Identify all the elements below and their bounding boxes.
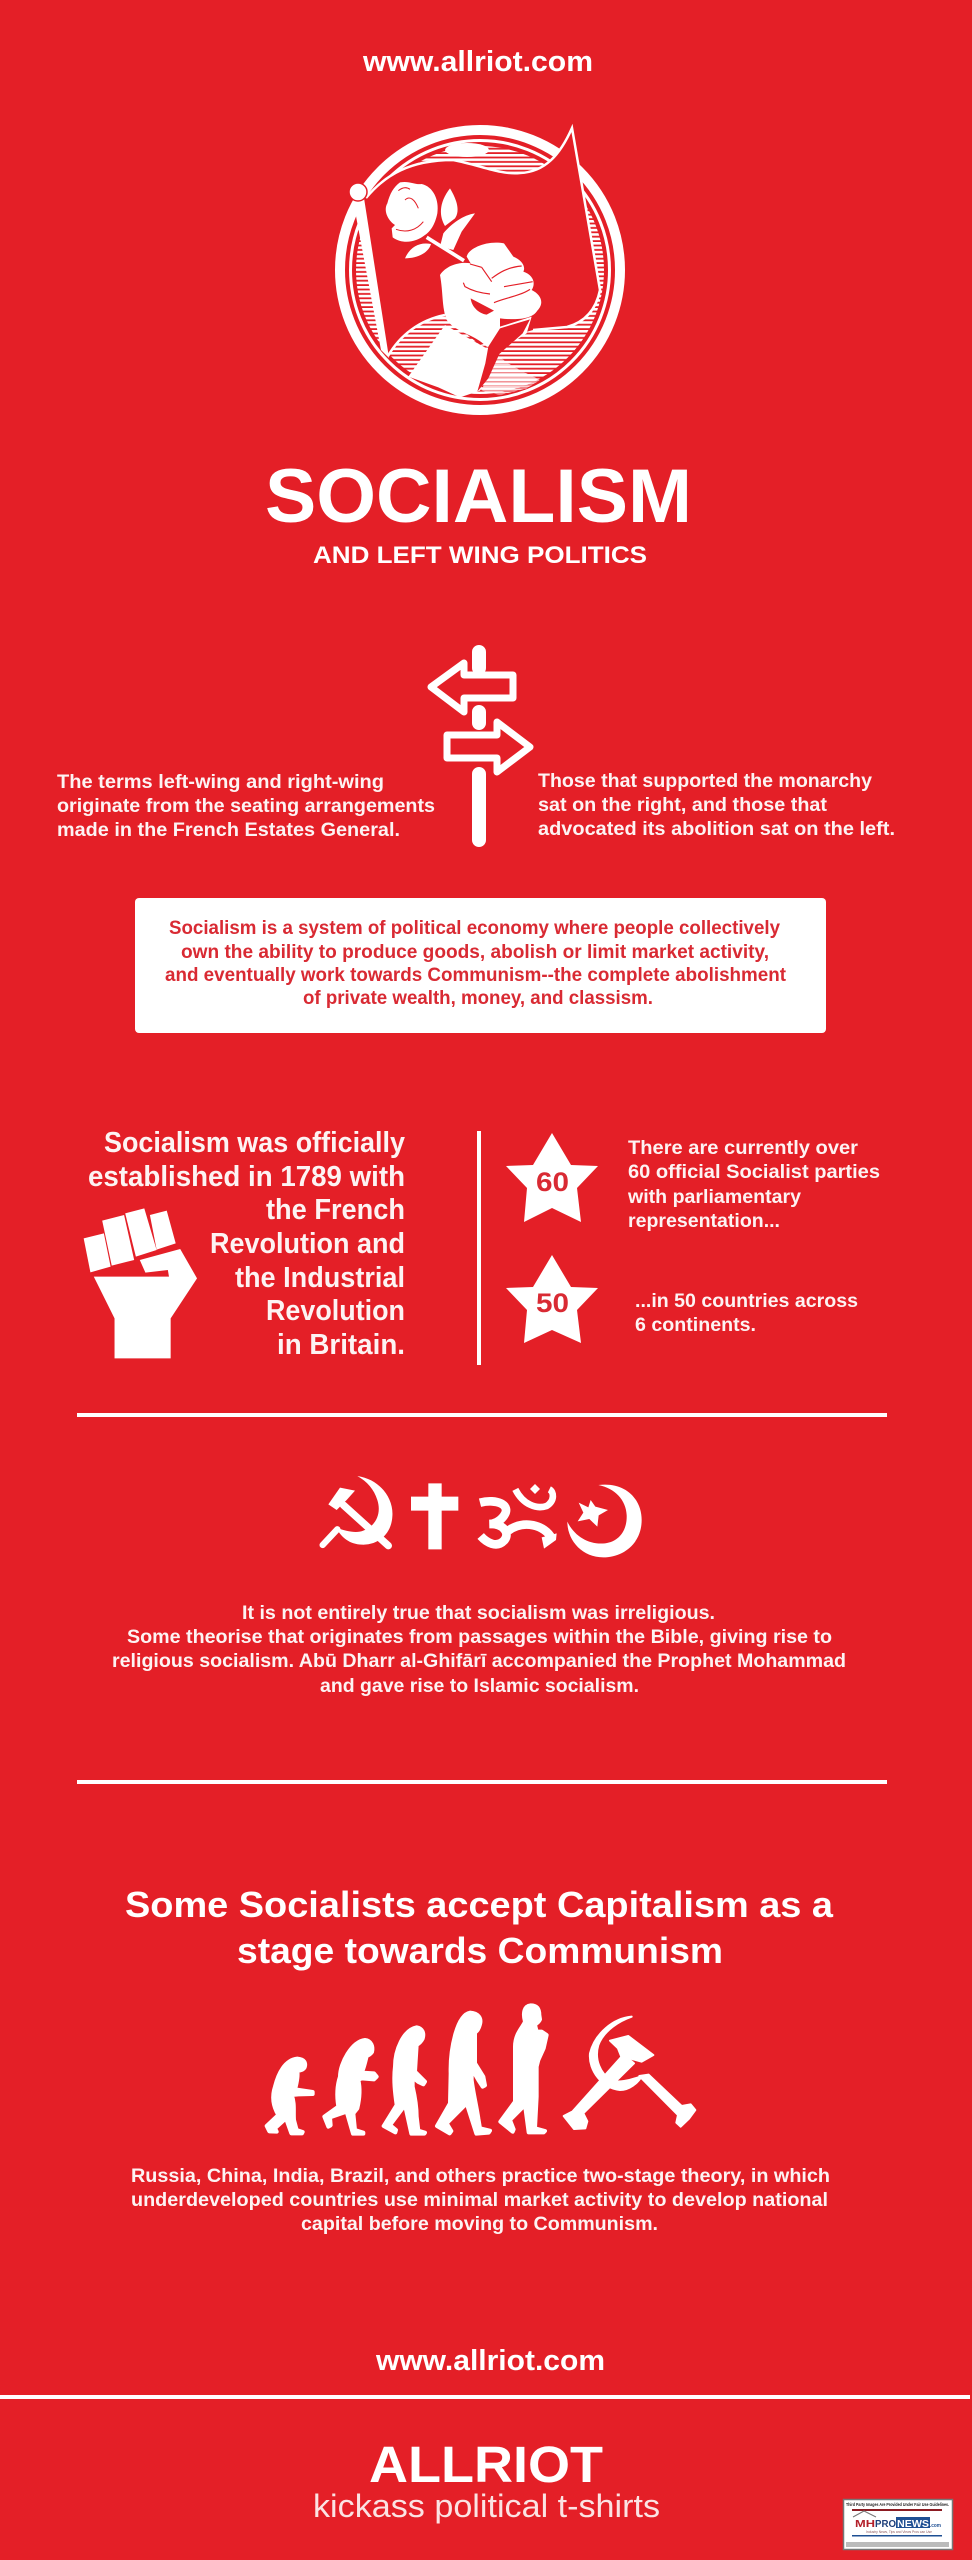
panel: definition of socialism: and eventually work towards Communism--the complete abolishment: [165, 965, 787, 986]
heading: capitalism as a stage: Some Socialists accept Capitalism as a: [125, 1884, 834, 1925]
icon: star 50: [506, 1255, 598, 1343]
text: establishment in 1789: in Britain.: [277, 1329, 405, 1361]
text: religion and socialism: [112, 1602, 846, 1697]
text: 60 parties: There are currently over: [628, 1137, 858, 1159]
icon: crescent and star: [567, 1485, 642, 1557]
icon: raised fist: [84, 1208, 197, 1358]
fist and arm: [386, 182, 541, 397]
text: left-wing origin: originate from the seating arrangements: [57, 795, 435, 817]
text: establishment in 1789: Revolution: [266, 1295, 405, 1327]
panel: definition of socialism: Socialism is a system of political economy where people collectively: [169, 918, 780, 939]
badge: MHProNews: [844, 2500, 952, 2550]
emblem: fist holding rose before flag: [340, 128, 620, 410]
icon: om: [480, 1484, 557, 1549]
panel: definition of socialism: [135, 898, 826, 1033]
text: two-stage theory: capital before moving to Communism.: [301, 2213, 658, 2235]
text: left-wing origin: The terms left-wing and right-wing: [57, 771, 384, 793]
text: 50 countries: [635, 1290, 858, 1336]
icons: religious and communist symbols: [323, 1476, 642, 1557]
text: monarchy sides: sat on the right, and those that: [538, 794, 828, 816]
badge: MHProNews: NEWS: [897, 2518, 929, 2530]
icon: star 60: [506, 1133, 598, 1222]
text: monarchy sides: advocated its abolition sat on the left.: [538, 818, 895, 840]
website url bottom: www.allriot.com: [375, 2345, 605, 2377]
text: monarchy sides: [538, 770, 895, 840]
icon: cross: [411, 1483, 458, 1549]
text: establishment in 1789: [88, 1127, 405, 1361]
icon: evolution towards hammer and sickle: [267, 2005, 695, 2134]
heading: capitalism as a stage: stage towards Communism: [237, 1930, 723, 1971]
text: 60 parties: [627, 1137, 880, 1232]
text: religion and socialism: and gave rise to Islamic socialism.: [320, 1675, 639, 1697]
text: religion and socialism: Some theorise that originates from passages within the Bible, giving rise to: [127, 1626, 832, 1648]
text: 50 countries: 6 continents.: [635, 1314, 756, 1336]
badge: MHProNews: MH: [855, 2518, 875, 2530]
badge: MHProNews: .com: [930, 2523, 942, 2529]
brand name: ALLRIOT: [369, 2436, 603, 2493]
tagline: kickass political t-shirts: [313, 2488, 660, 2524]
flag pole: [353, 198, 389, 358]
text: establishment in 1789: the French: [266, 1194, 405, 1226]
text: left-wing origin: [57, 771, 435, 841]
text: establishment in 1789: the Industrial: [235, 1262, 405, 1294]
text: two-stage theory: Russia, China, India, Brazil, and others practice two-stage theory, in which: [131, 2165, 830, 2187]
text: establishment in 1789: established in 1789 with: [88, 1161, 405, 1193]
flag: [362, 128, 600, 355]
heading: capitalism as a stage: [125, 1884, 834, 1971]
text: religion and socialism: It is not entirely true that socialism was irreligious.: [242, 1602, 715, 1624]
vertical divider: [477, 1131, 481, 1365]
text: monarchy sides: Those that supported the monarchy: [538, 770, 872, 792]
rose: [386, 182, 475, 261]
text: left-wing origin: made in the French Estates General.: [57, 819, 400, 841]
icon: star 50: 50: [536, 1288, 569, 1318]
title: SOCIALISM: [265, 454, 692, 539]
text: 60 parties: 60 official Socialist parties: [628, 1161, 880, 1183]
text: establishment in 1789: Revolution and: [210, 1228, 405, 1260]
icon: hammer and sickle: [323, 1476, 392, 1546]
panel: definition of socialism: own the ability to produce goods, abolish or limit market activity,: [181, 942, 769, 963]
text: 60 parties: with parliamentary: [627, 1186, 801, 1208]
badge: MHProNews: Industry News, Tips and Views Pros can Use: [866, 2530, 932, 2534]
text: 60 parties: representation...: [628, 1210, 780, 1232]
text: 50 countries: ...in 50 countries across: [635, 1290, 858, 1312]
icon: signpost with left and right arrows: [431, 652, 530, 840]
subtitle: AND LEFT WING POLITICS: [313, 542, 647, 569]
text: two-stage theory: [131, 2165, 830, 2235]
icon: star 60: 60: [536, 1167, 569, 1197]
text: two-stage theory: underdeveloped countries use minimal market activity to develop national: [131, 2189, 828, 2211]
website url top: www.allriot.com: [362, 46, 593, 78]
text: religion and socialism: religious socialism. Abū Dharr al-Ghifārī accompanied the Prophet Mohammad: [112, 1650, 846, 1672]
text: establishment in 1789: Socialism was officially: [104, 1127, 405, 1159]
panel: definition of socialism: of private wealth, money, and classism.: [303, 988, 653, 1009]
badge: MHProNews: PRO: [875, 2518, 896, 2530]
